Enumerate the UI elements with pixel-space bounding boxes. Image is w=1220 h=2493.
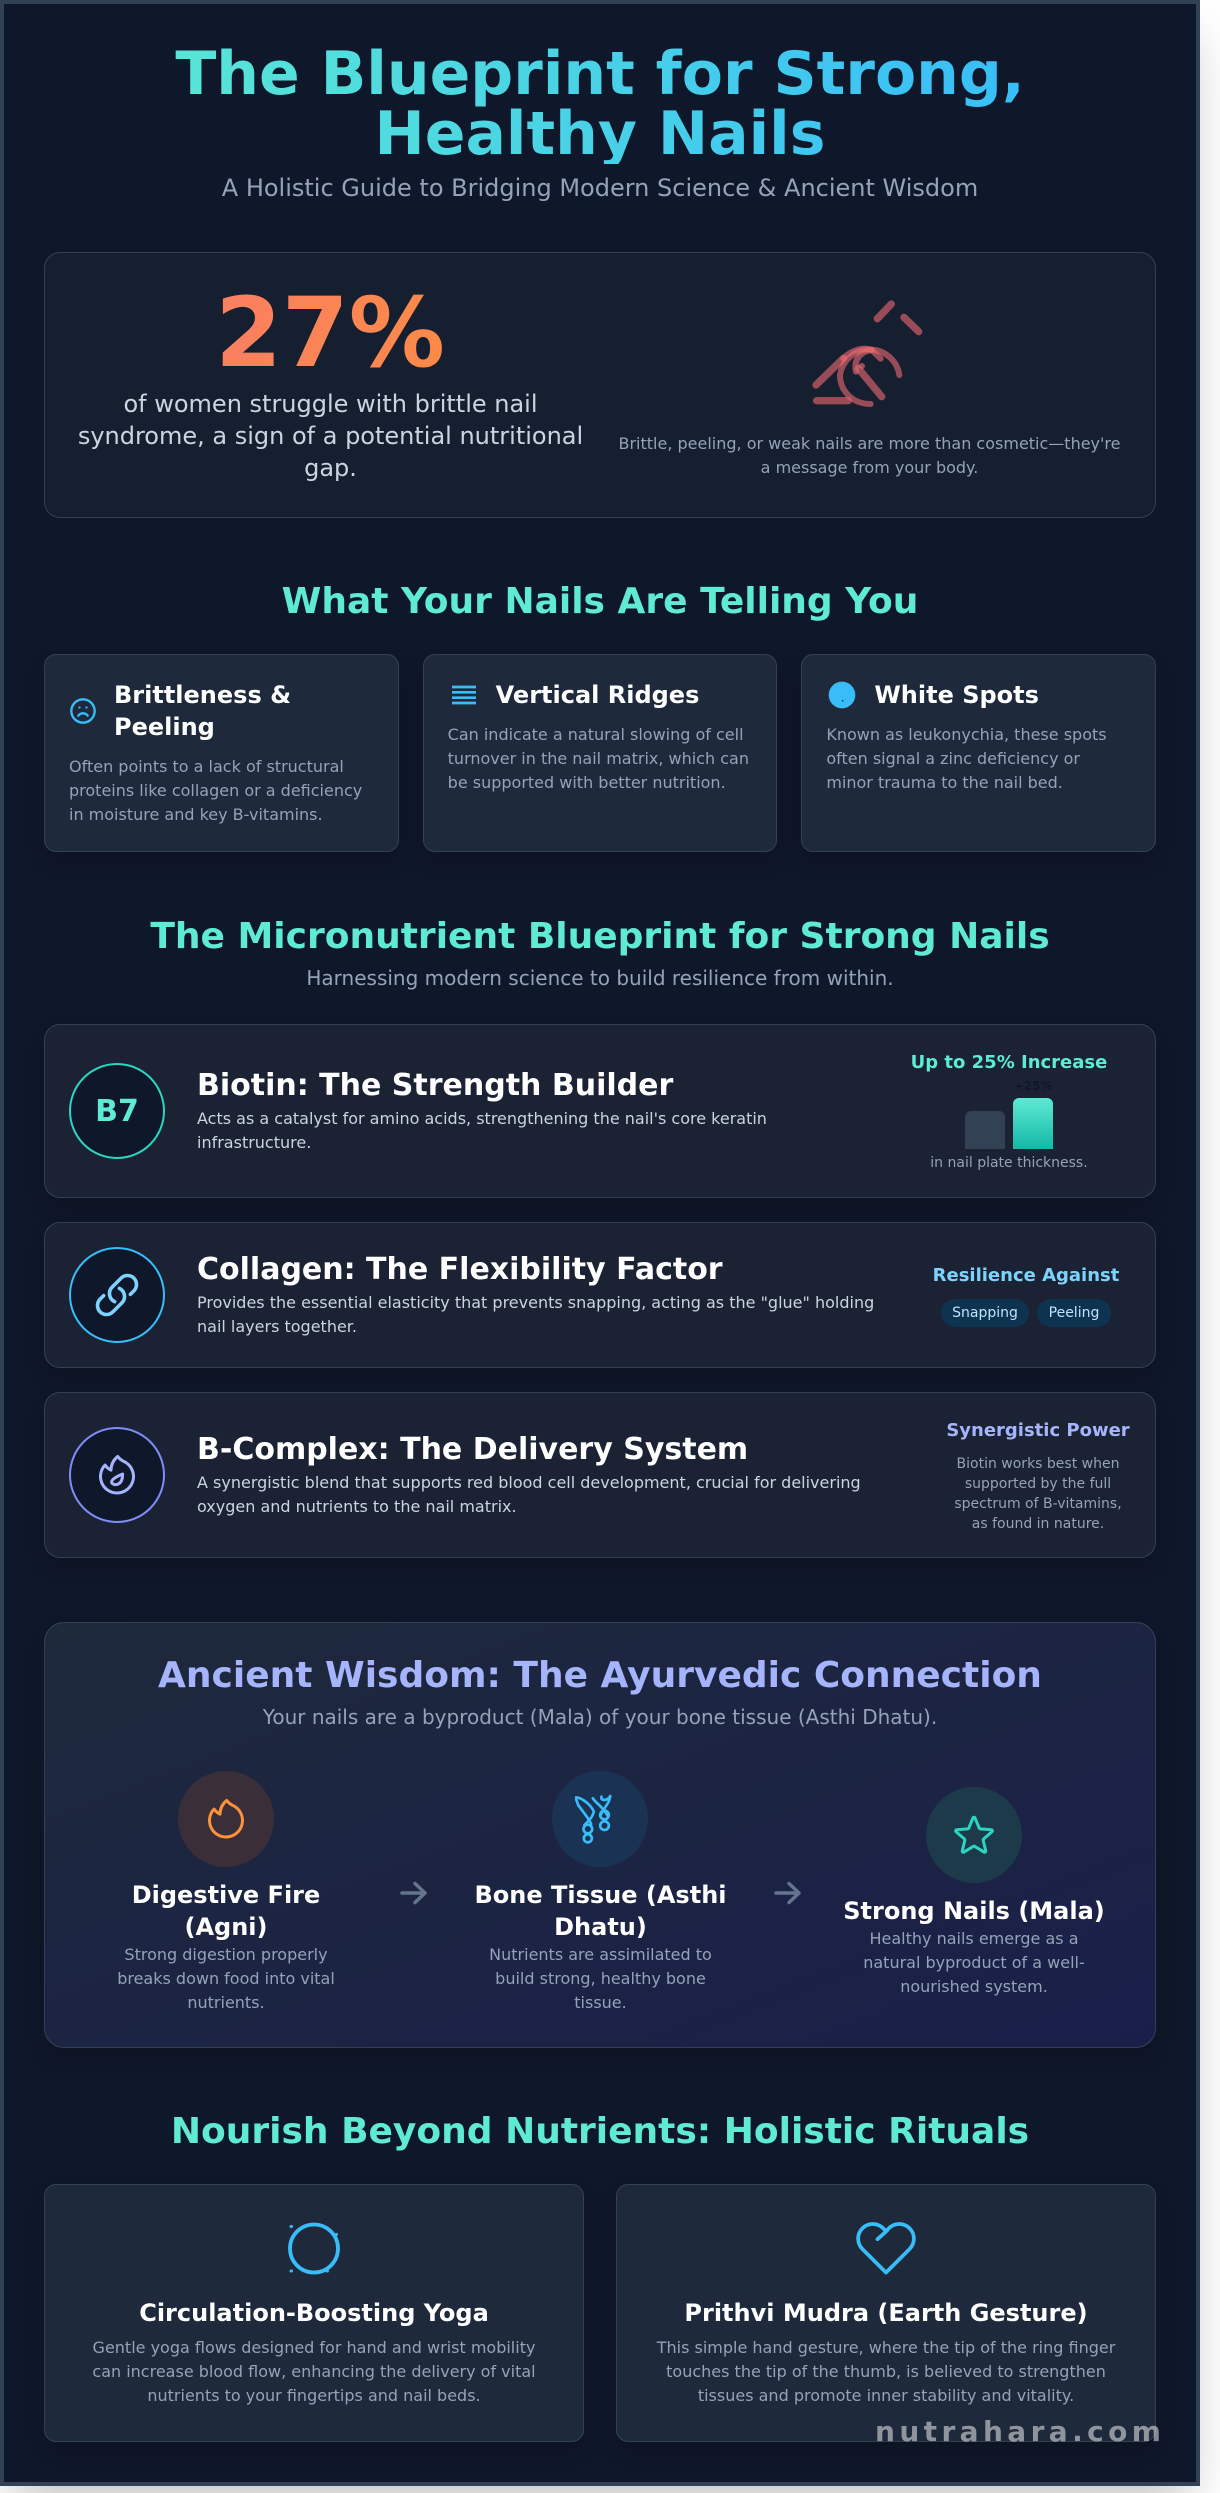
stat heading: Up to 25% Increase xyxy=(911,1052,1107,1073)
statistic note xyxy=(618,434,1120,477)
step title: Strong Nails (Mala) xyxy=(843,1897,1105,1925)
icon: flame with drop xyxy=(69,1427,165,1523)
nutrient text: oxygen and nutrients to the nail matrix. xyxy=(197,1497,517,1516)
icon: link xyxy=(69,1247,165,1343)
icon: flame xyxy=(178,1771,274,1867)
symptom title xyxy=(114,681,291,741)
step text: nutrients. xyxy=(187,1993,265,2012)
symptom text: turnover in the nail matrix, which can xyxy=(448,749,749,768)
icon: ridge lines xyxy=(452,686,476,704)
tag: snapping: Snapping xyxy=(952,1304,1018,1320)
title: Healthy Nails xyxy=(375,99,825,169)
ritual title: Prithvi Mudra (Earth Gesture) xyxy=(684,2299,1088,2327)
step text: tissue. xyxy=(574,1993,627,2012)
tag: peeling: Peeling xyxy=(1049,1304,1099,1320)
step: digestive fire xyxy=(117,1771,335,2012)
ritual text xyxy=(656,2338,1116,2405)
ritual text: touches the tip of the thumb, is believed to strengthen xyxy=(666,2362,1106,2381)
icon: hand and broken nail xyxy=(812,300,922,407)
subtitle: A Holistic Guide to Bridging Modern Science & Ancient Wisdom xyxy=(222,174,978,202)
symptom title: Brittleness & xyxy=(114,681,291,709)
nutrient text: infrastructure. xyxy=(197,1133,311,1152)
ritual text: Gentle yoga flows designed for hand and wrist mobility xyxy=(93,2338,535,2357)
section subtitle: Harnessing modern science to build resilience from within. xyxy=(306,966,894,990)
step text: Strong digestion properly xyxy=(124,1945,328,1964)
symptom text xyxy=(826,725,1107,792)
statistic description: gap. xyxy=(304,454,357,482)
ritual text: This simple hand gesture, where the tip of the ring finger xyxy=(657,2338,1115,2357)
bar: baseline xyxy=(965,1111,1005,1149)
symptom text: in moisture and key B-vitamins. xyxy=(69,805,323,824)
panel: biotin xyxy=(44,1024,1156,1198)
icon: star xyxy=(926,1787,1022,1883)
bar: +25% xyxy=(1013,1098,1053,1149)
nutrient title: B-Complex: The Delivery System xyxy=(197,1432,748,1467)
icon: heart xyxy=(856,2222,916,2275)
icon: bone tissue strands xyxy=(552,1771,648,1867)
symptom title: Peeling xyxy=(114,713,215,741)
nutrient text: nail layers together. xyxy=(197,1317,357,1336)
panel: ayurvedic connection xyxy=(44,1622,1156,2048)
step title: (Agni) xyxy=(184,1913,268,1941)
step text xyxy=(117,1945,335,2012)
statistic note: Brittle, peeling, or weak nails are more than cosmetic—they're xyxy=(618,434,1120,453)
symptom text xyxy=(69,757,362,824)
step text: natural byproduct of a well- xyxy=(863,1953,1085,1972)
heading: micronutrient blueprint: The Micronutrient Blueprint for Strong Nails xyxy=(150,916,1050,957)
step text: Nutrients are assimilated to xyxy=(489,1945,712,1964)
ritual text: tissues and promote inner stability and vitality. xyxy=(698,2386,1074,2405)
nutrient text: Provides the essential elasticity that prevents snapping, acting as the "glue" holding xyxy=(197,1293,874,1312)
symptom title: White Spots xyxy=(874,681,1039,709)
symptom text: be supported with better nutrition. xyxy=(448,773,726,792)
panel: white spots xyxy=(801,654,1156,852)
step title xyxy=(132,1881,320,1941)
stat text: spectrum of B-vitamins, xyxy=(954,1496,1122,1512)
symptom text: minor trauma to the nail bed. xyxy=(826,773,1063,792)
stat heading: Resilience Against xyxy=(933,1265,1119,1286)
stat text xyxy=(954,1456,1122,1532)
stat heading: Synergistic Power xyxy=(946,1420,1130,1441)
step title xyxy=(474,1881,726,1941)
nutrient text xyxy=(197,1473,861,1516)
step title: Digestive Fire xyxy=(132,1881,320,1909)
step title: Bone Tissue (Asthi xyxy=(474,1881,726,1909)
panel: b-complex xyxy=(44,1392,1156,1558)
bar label: +25% xyxy=(1014,1079,1052,1093)
panel subtitle: Your nails are a byproduct (Mala) of your bone tissue (Asthi Dhatu). xyxy=(263,1705,937,1729)
nutrient text xyxy=(197,1293,874,1336)
symptom text: often signal a zinc deficiency or xyxy=(826,749,1080,768)
watermark: nutrahara.com xyxy=(875,2415,1165,2448)
stat text: supported by the full xyxy=(965,1476,1111,1492)
panel: circulation yoga xyxy=(44,2184,584,2442)
symptom title: Vertical Ridges xyxy=(496,681,699,709)
title xyxy=(175,44,1025,164)
tag: snapping xyxy=(941,1298,1029,1326)
statistic note: a message from your body. xyxy=(761,458,978,477)
icon: spot xyxy=(828,682,856,708)
ritual title: Circulation-Boosting Yoga xyxy=(139,2299,489,2327)
heading: what your nails are telling you: What Your Nails Are Telling You xyxy=(282,581,918,622)
step text xyxy=(863,1929,1085,1996)
nutrient text: Acts as a catalyst for amino acids, strengthening the nail's core keratin xyxy=(197,1109,767,1128)
symptom text xyxy=(448,725,749,792)
icon: B7 badge: B7 xyxy=(95,1094,139,1128)
step text: nourished system. xyxy=(900,1977,1048,1996)
panel: vertical ridges xyxy=(423,654,777,852)
heading: holistic rituals: Nourish Beyond Nutrients: Holistic Rituals xyxy=(171,2111,1029,2152)
symptom text: Known as leukonychia, these spots xyxy=(826,725,1107,744)
statistic description: of women struggle with brittle nail xyxy=(123,390,538,418)
panel: 27% statistic xyxy=(44,252,1156,518)
ritual text: nutrients to your fingertips and nail beds. xyxy=(147,2386,481,2405)
nutrient title: Biotin: The Strength Builder xyxy=(197,1068,673,1103)
step: bone tissue xyxy=(474,1771,726,2012)
step text: breaks down food into vital xyxy=(117,1969,335,1988)
chart caption: in nail plate thickness. xyxy=(930,1155,1088,1171)
arrow xyxy=(774,1882,801,1904)
panel: prithvi mudra xyxy=(616,2184,1156,2442)
icon: frown xyxy=(70,698,96,724)
ritual text: can increase blood flow, enhancing the delivery of vital xyxy=(92,2362,536,2381)
statistic description: syndrome, a sign of a potential nutritional xyxy=(78,422,583,450)
arrow xyxy=(400,1882,427,1904)
step title: Dhatu) xyxy=(554,1913,647,1941)
icon: circulation ring xyxy=(288,2222,340,2274)
bar chart: nail plate thickness xyxy=(965,1079,1053,1149)
big number: 27%: 27% xyxy=(215,277,445,389)
symptom text: proteins like collagen or a deficiency xyxy=(69,781,362,800)
panel: collagen xyxy=(44,1222,1156,1368)
nutrient text xyxy=(197,1109,767,1152)
symptom text: Often points to a lack of structural xyxy=(69,757,344,776)
stat text: Biotin works best when xyxy=(957,1456,1119,1472)
icon: B7 badge xyxy=(69,1063,165,1159)
step text: Healthy nails emerge as a xyxy=(869,1929,1079,1948)
panel: brittleness and peeling xyxy=(44,654,399,852)
symptom text: Can indicate a natural slowing of cell xyxy=(448,725,744,744)
ritual text xyxy=(92,2338,536,2405)
nutrient title: Collagen: The Flexibility Factor xyxy=(197,1252,723,1287)
title: The Blueprint for Strong, xyxy=(175,39,1025,109)
stat text: as found in nature. xyxy=(972,1516,1104,1532)
panel heading: Ancient Wisdom: The Ayurvedic Connection xyxy=(158,1655,1042,1696)
step text xyxy=(489,1945,712,2012)
step text: build strong, healthy bone xyxy=(495,1969,706,1988)
step: strong nails xyxy=(843,1787,1105,1996)
nutrient text: A synergistic blend that supports red blood cell development, crucial for delivering xyxy=(197,1473,861,1492)
statistic description xyxy=(78,390,583,482)
tag: peeling xyxy=(1037,1298,1111,1326)
